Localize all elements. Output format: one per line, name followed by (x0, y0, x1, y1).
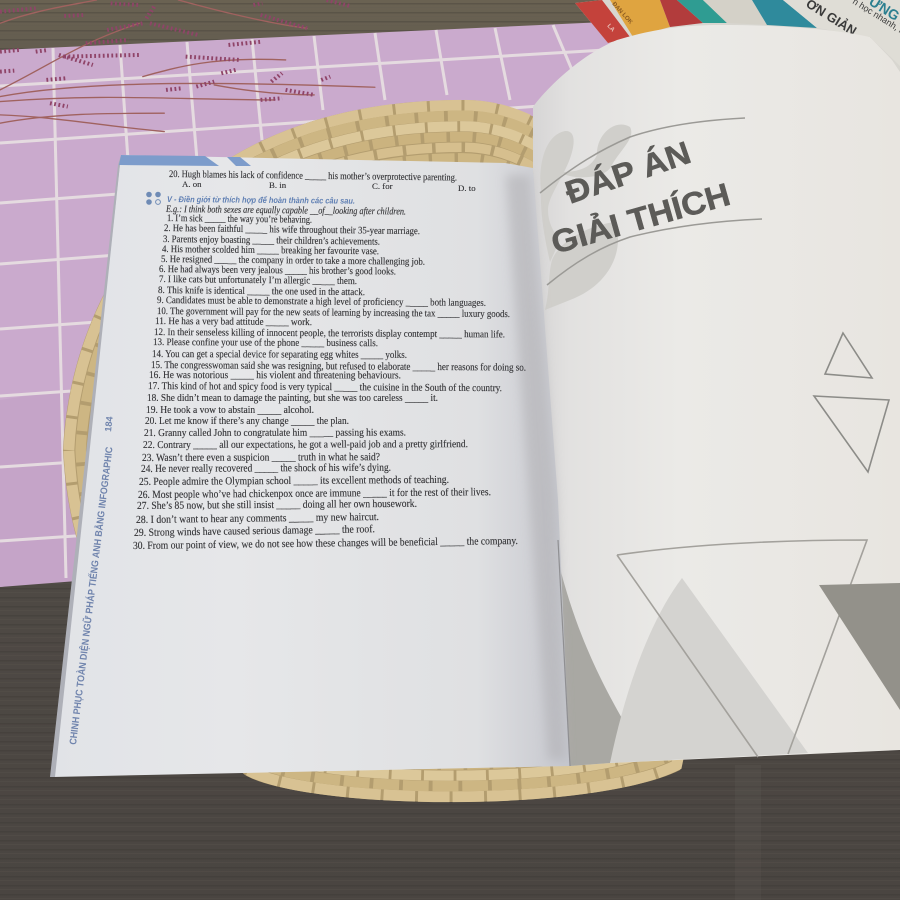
page edge (50, 155, 121, 777)
exercise sentences, middle block: 21. Granny called John to congratulate him _____ passing his exams. (144, 428, 406, 439)
exercise sentences, middle block: 18. She didn’t mean to damage the painting, but she was too careless _____ it. (147, 393, 438, 404)
light gray triangle (610, 578, 808, 763)
example sentence: E.g.: I think both sexes are equally capable __of__looking after children. (165, 204, 406, 218)
exercise sentences, lower block (133, 451, 518, 552)
exercise sentences: 6. He had always been very jealous _____ his brother’s good looks. (159, 264, 396, 277)
exercise sentences, middle block: 15. The congresswoman said she was resigning, but refused to elaborate _____ her reasons for doing so. (151, 360, 526, 374)
stack of books (575, 0, 900, 75)
exercise sentences: 3. Parents enjoy boasting _____ their children’s achievements. (163, 234, 380, 248)
gutter gray shape (558, 560, 623, 766)
exercise sentences (153, 213, 510, 349)
exercise sentences: 1. I’m sick _____ the way you’re behaving. (167, 213, 312, 226)
question 20 (169, 169, 476, 193)
section bullets (146, 192, 161, 205)
question 20: B. in (269, 180, 287, 190)
chapter heading: GIẢI THÍCH (547, 176, 734, 261)
book left page (50, 155, 570, 777)
chapter heading lines (540, 118, 745, 193)
stack of books: LA (606, 23, 616, 34)
exercise sentences: 13. Please confine your use of the phone _____ business calls. (153, 337, 378, 349)
section heading: V - Điền giới từ thích hợp để hoàn thành các câu sau. (167, 194, 355, 206)
question 20: D. to (458, 183, 476, 193)
exercise sentences, middle block: 19. He took a vow to abstain _____ alcohol. (146, 405, 314, 416)
exercise sentences, lower block: 26. Most people who’ve had chickenpox once are immune _____ it for the rest of their lives. (138, 486, 491, 501)
exercise sentences, lower block: 23. Wasn’t there even a suspicion _____ truth in what he said? (142, 451, 380, 464)
exercise sentences, lower block: 25. People admire the Olympian school _____ its excellent methods of teaching. (139, 474, 449, 488)
vertical book title on page edge: 184 (103, 415, 115, 432)
question 20: 20. Hugh blames his lack of confidence _____ his mother’s overprotective parenting. (169, 169, 457, 184)
exercise sentences: 4. His mother scolded him _____ breaking her favourite vase. (162, 244, 379, 257)
exercise sentences, middle block (143, 349, 526, 451)
exercise sentences, lower block: 29. Strong winds have caused serious damage _____ the roof. (134, 523, 375, 539)
lilac grid mat (0, 22, 700, 587)
exercise sentences, middle block: 16. He was notorious _____ his violent and threatening behaviours. (149, 370, 401, 381)
blue header tab (119, 155, 251, 166)
exercise sentences, lower block: 28. I don’t want to hear any comments _____ my new haircut. (136, 511, 379, 526)
gutter shadow, clipped softly inside the page (506, 175, 566, 760)
medium triangle outline (814, 396, 889, 472)
exercise sentences: 12. In their senseless killing of innocent people, the terrorists display contempt _____ human life. (154, 327, 505, 340)
woven straw placemat (63, 100, 705, 802)
dried flower twigs (0, 0, 375, 132)
exercise sentences, middle block: 22. Contrary _____ all our expectations, he got a well-paid job and a pretty girlfriend. (143, 439, 468, 451)
small triangle outline (825, 333, 872, 378)
question 20: A. on (182, 179, 202, 189)
vertical book title on page edge: CHINH PHỤC TOÀN DIỆN NGỮ PHÁP TIẾNG ANH BẰNG INFOGRAPHIC (67, 446, 116, 745)
exercise sentences, lower block: 24. He never really recovered _____ the shock of his wife’s dying. (141, 462, 391, 475)
chapter heading (547, 134, 734, 261)
exercise sentences, lower block: 27. She’s 85 now, but she still insist _____ doing all her own housework. (137, 498, 417, 512)
stack of books: ĐAN LOK (611, 1, 634, 26)
exercise sentences, middle block: 20. Let me know if there’s any change _____ the plan. (145, 416, 349, 427)
chapter heading: ĐÁP ÁN (561, 134, 695, 211)
large triangle outline (617, 540, 867, 757)
exercise sentences: 7. I like cats but unfortunately I’m allergic _____ them. (159, 274, 357, 287)
exercise sentences: 8. This knife is identical _____ the one used in the attack. (158, 285, 365, 298)
dark gray polygon (819, 583, 900, 710)
exercise sentences: 10. The government will pay for the new seats of learning by increasing the tax _____ luxury goods. (157, 306, 510, 320)
exercise sentences, middle block: 14. You can get a special device for separating egg whites _____ yolks. (152, 349, 407, 361)
exercise sentences, middle block: 17. This kind of hot and spicy food is very typical _____ the cuisine in the South of the country. (148, 381, 502, 394)
exercise sentences: 2. He has been faithful _____ his wife throughout their 35-year marriage. (164, 223, 420, 237)
chapter ornament: gray clef shape (540, 125, 631, 310)
exercise sentences: 11. He has a very bad attitude _____ work. (155, 316, 312, 328)
exercise sentences: 9. Candidates must be able to demonstrate a high level of proficiency _____ both languages. (157, 295, 486, 309)
exercise sentences: 5. He resigned _____ the company in order to take a more challenging job. (161, 254, 425, 268)
book right page (533, 25, 900, 766)
question 20: C. for (372, 181, 393, 191)
exercise sentences, lower block: 30. From our point of view, we do not see how these changes will be beneficial _____ the company. (133, 535, 518, 552)
